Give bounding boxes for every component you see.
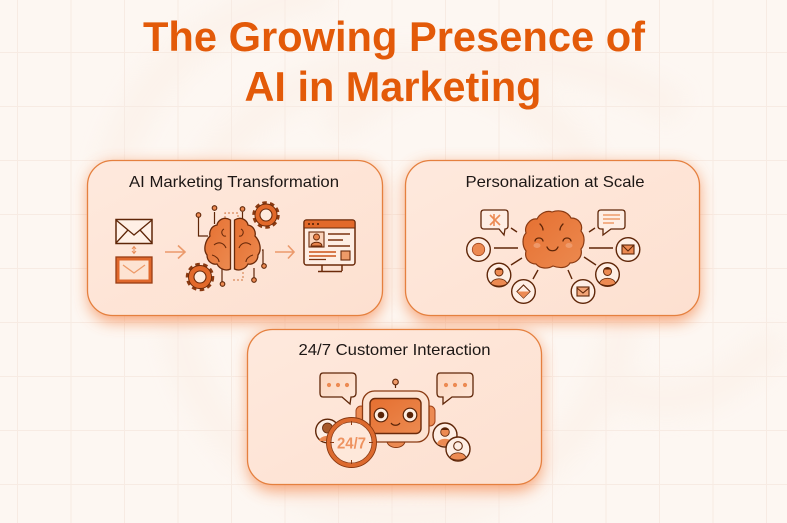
icon: 24/7 clock: 24/7 (337, 436, 366, 452)
panel: AI Marketing Transformation (88, 160, 382, 316)
connector lines (494, 228, 613, 279)
icon: gear bottom left (188, 265, 212, 289)
icon: chat bubble left (481, 210, 508, 235)
panel: 24/7 Customer Interaction (248, 330, 542, 484)
icon: 24/7 clock (326, 418, 376, 468)
title: The Growing Presence of (143, 13, 646, 60)
heading: Personalization at Scale: Personalization at Scale (466, 174, 645, 191)
icon: person right upper (433, 423, 457, 447)
icon: person behind clock (316, 419, 339, 443)
icon: envelopes (116, 220, 152, 283)
heading: AI Marketing Transformation: AI Marketing Transformation (129, 174, 339, 191)
icon: mail node bottom (571, 280, 595, 303)
arrow: to screen (275, 246, 294, 258)
icon: robot (356, 379, 435, 448)
icon: circuit brain (196, 206, 266, 286)
icon: mail node right (616, 238, 640, 261)
icon: chat bubble right (437, 373, 473, 404)
icon: smiling brain (523, 211, 584, 268)
heading: 24/7 Customer Interaction: 24/7 Customer Interaction (298, 342, 490, 359)
icon: monitor (304, 220, 355, 272)
icon: chat bubble left (320, 373, 356, 404)
arrow: to brain (165, 246, 185, 258)
icon: person right lower (446, 437, 470, 461)
icon: person right (596, 263, 619, 286)
icon: chat bubble right (598, 210, 625, 235)
icon: circle node (467, 238, 490, 261)
title: AI in Marketing (244, 63, 542, 110)
icon: gear top right (254, 204, 278, 226)
panel: Personalization at Scale (406, 160, 700, 316)
icon: diamond node (512, 280, 535, 303)
icon: person left (487, 263, 511, 287)
title (143, 13, 646, 110)
